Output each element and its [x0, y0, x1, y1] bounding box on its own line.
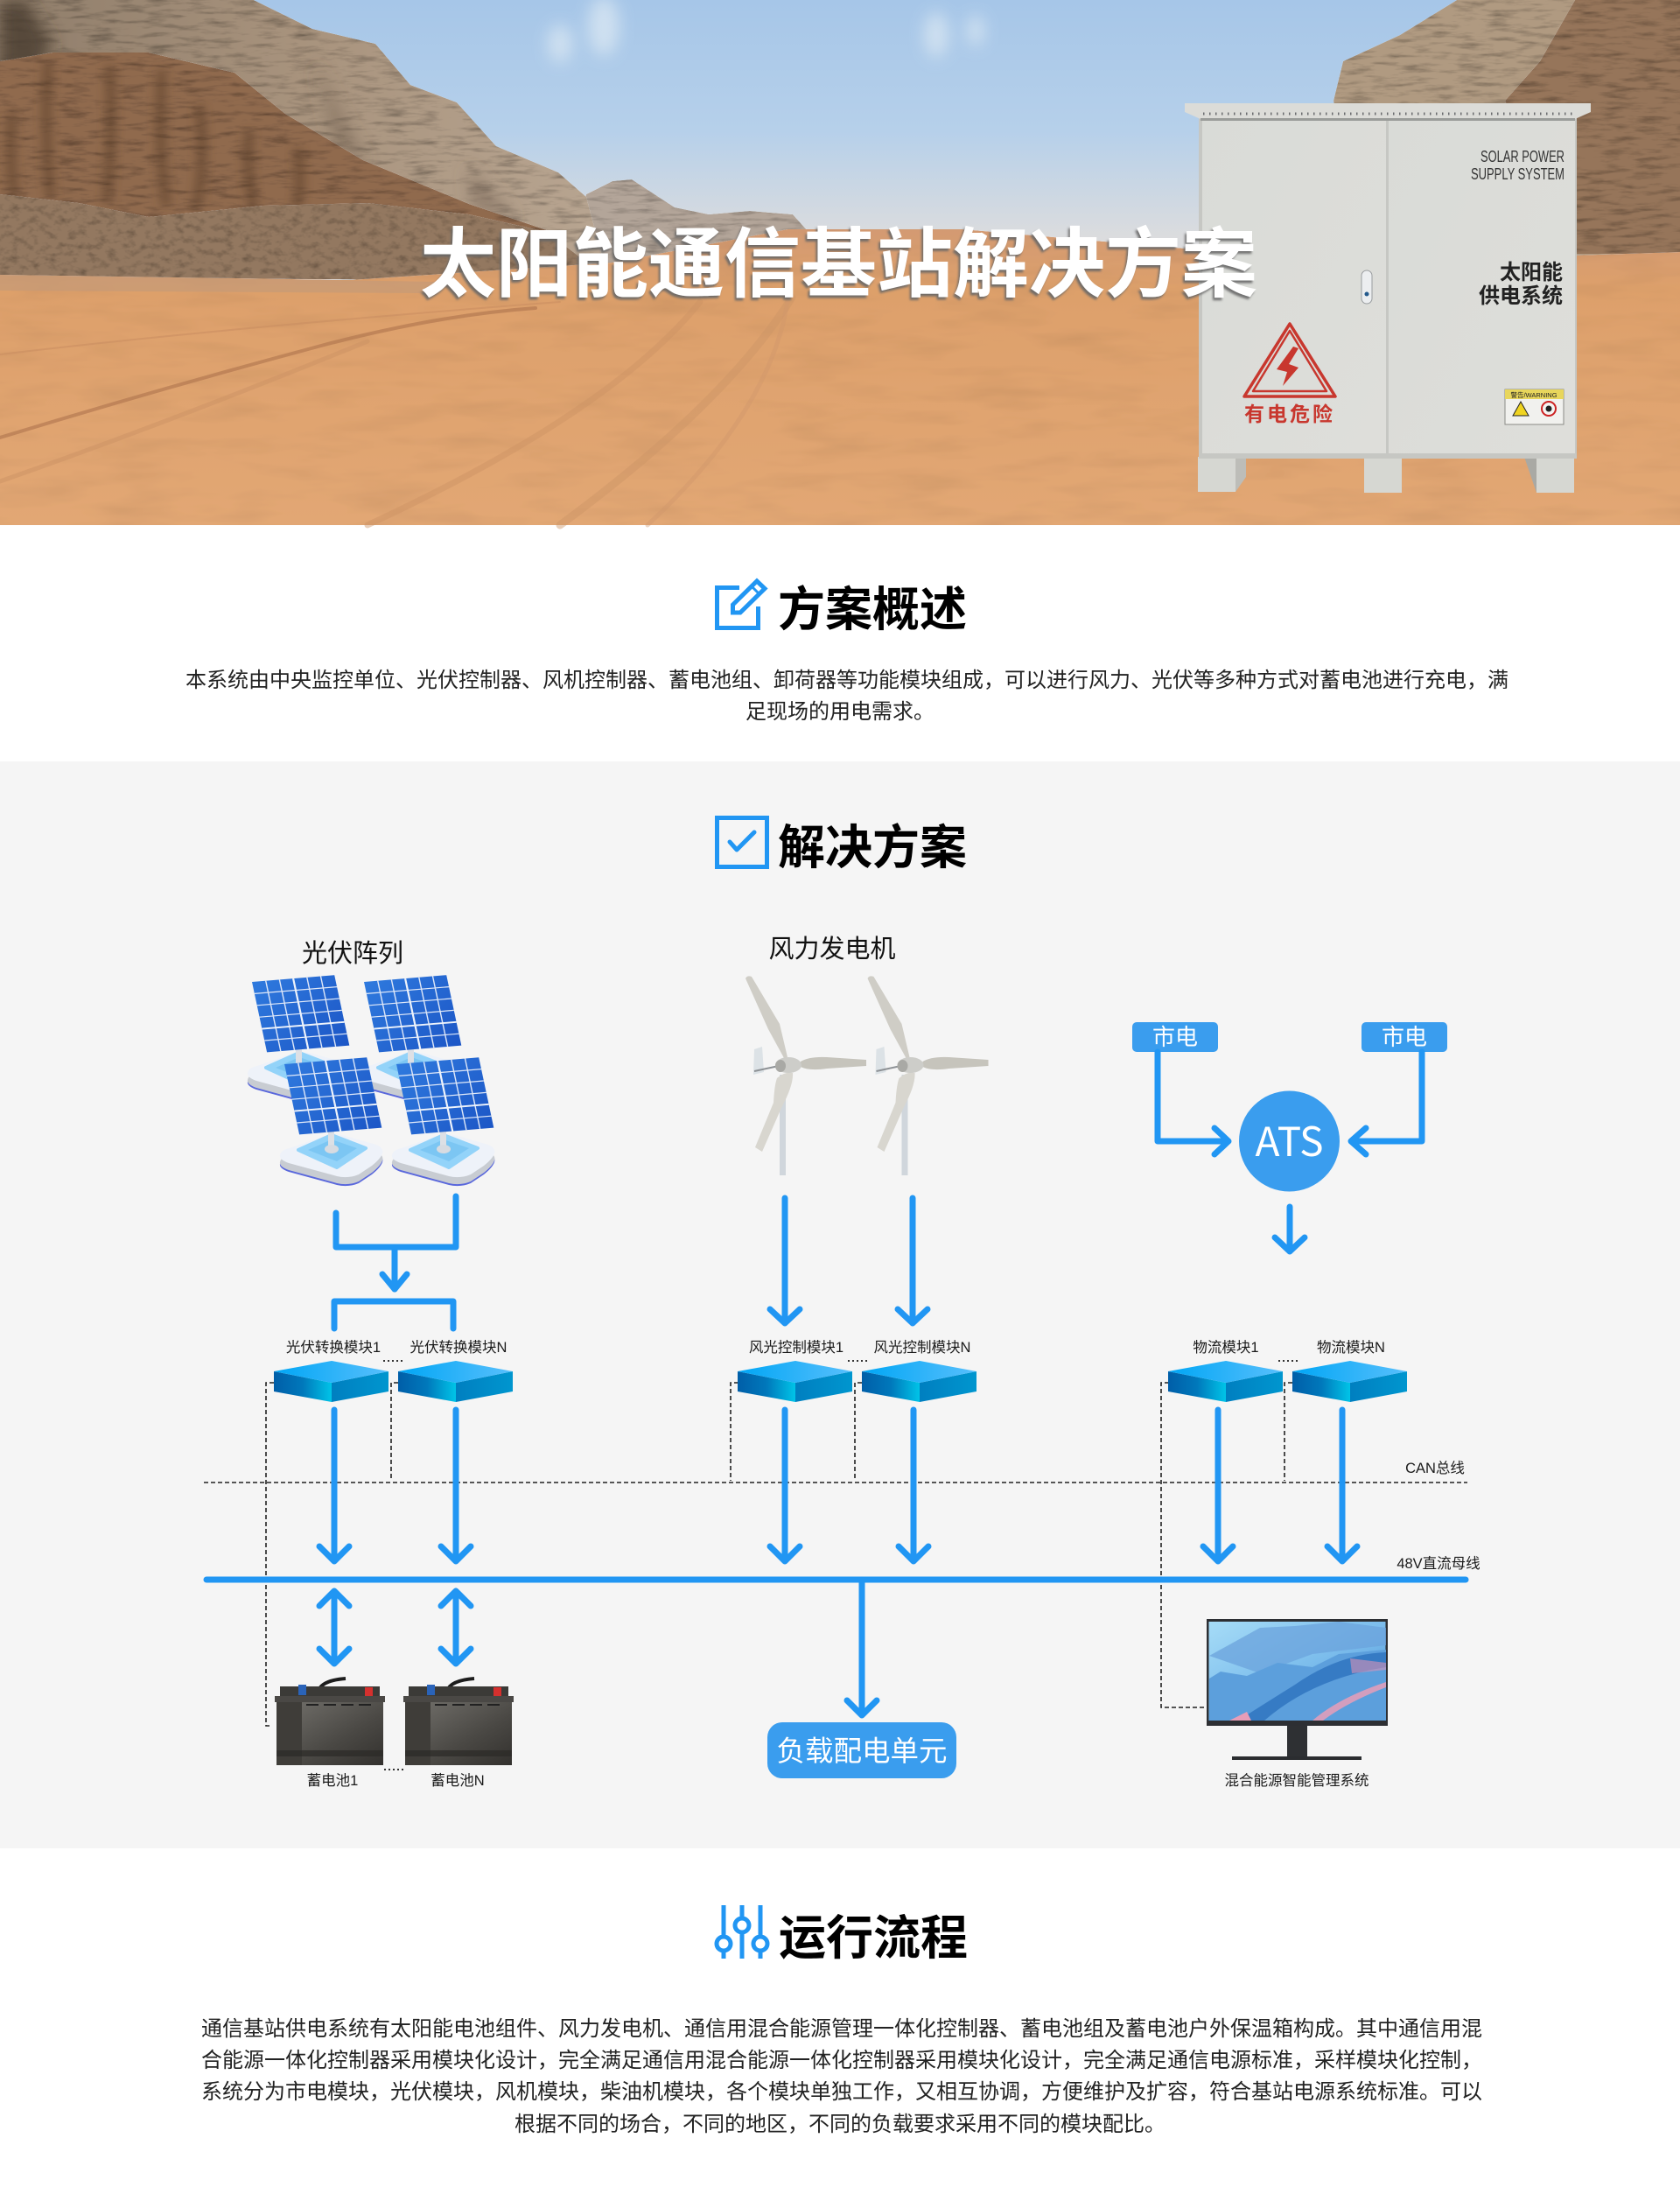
box: mains 1 — [1132, 1022, 1218, 1052]
rock: back cliff — [0, 0, 604, 280]
rock: front cliff — [0, 53, 578, 280]
module labels: 风光控制模块N — [874, 1339, 970, 1356]
sand — [0, 229, 1680, 525]
box: mains 2: 市电 — [1382, 1024, 1427, 1050]
module labels — [286, 1339, 1385, 1356]
arrow: bus to load — [847, 1580, 877, 1715]
rock: right dark cliff — [1505, 0, 1680, 254]
batteries — [275, 1679, 514, 1770]
process text — [201, 2017, 1482, 2136]
load unit button: 负载配电单元 — [776, 1735, 948, 1767]
cabinet english text: SUPPLY SYSTEM — [1471, 165, 1564, 183]
sand tracks — [0, 298, 792, 525]
section: overview — [186, 581, 1508, 724]
section background: solution — [0, 761, 1680, 1848]
warning label — [1505, 389, 1564, 424]
monitor — [1207, 1619, 1388, 1760]
module labels: 光伏转换模块N — [410, 1339, 507, 1356]
arrows: battery double — [319, 1591, 471, 1664]
label: battery n: 蓄电池N — [430, 1772, 485, 1789]
danger triangle — [1244, 324, 1335, 396]
module labels: 风光控制模块1 — [749, 1339, 844, 1356]
cabinet english text — [1471, 148, 1564, 183]
danger text: 有电危险 — [1244, 403, 1335, 425]
diagram: system — [204, 935, 1480, 1789]
overview text: 本系统由中央监控单位、光伏控制器、风机控制器、蓄电池组、卸荷器等功能模块组成，可以进行风力、光伏等多种方式对蓄电池进行充电，满 — [186, 669, 1508, 692]
pv panels — [248, 975, 494, 1186]
icon: sliders — [717, 1905, 767, 1959]
rock: right mountains — [1334, 0, 1680, 280]
module labels: 光伏转换模块1 — [286, 1339, 381, 1356]
clouds — [548, 0, 984, 63]
rock: back cliff shadows — [0, 0, 516, 219]
rock: cliff columns — [10, 61, 300, 210]
wind turbines — [746, 976, 989, 1175]
rock: far mountains — [560, 179, 814, 298]
dc bus line — [206, 1577, 1466, 1582]
left door — [1202, 121, 1386, 453]
box: mains 2 — [1362, 1022, 1447, 1052]
grid inputs — [1132, 1022, 1447, 1251]
module labels: 物流模块1 — [1193, 1339, 1259, 1356]
label: pv array: 光伏阵列 — [302, 939, 403, 968]
box: mains 1: 市电 — [1152, 1024, 1198, 1050]
load unit button — [767, 1722, 956, 1778]
far sand band — [0, 275, 438, 293]
hero title: 太阳能通信基站解决方案 — [420, 222, 1257, 307]
section: solution heading — [718, 817, 967, 874]
right door — [1389, 121, 1575, 453]
process text: 系统分为市电模块，光伏模块，风机模块，柴油机模块，各个模块单独工作，又相互协调，方便维护及扩容，符合基站电源系统标准。可以 — [201, 2080, 1482, 2104]
cabinet — [1185, 103, 1591, 493]
label: can bus: CAN总线 — [1405, 1460, 1465, 1476]
module boxes — [274, 1361, 1407, 1402]
arrow: pv brackets — [334, 1196, 456, 1328]
overview text — [186, 669, 1508, 724]
process text: 通信基站供电系统有太阳能电池组件、风力发电机、通信用混合能源管理一体化控制器、蓄电池组及蓄电池户外保温箱构成。其中通信用混 — [201, 2017, 1482, 2041]
panel: hero banner — [0, 0, 1680, 525]
icon: checkbox — [718, 817, 766, 866]
arrows: mains to ats — [1158, 1052, 1422, 1251]
process text: 根据不同的场合，不同的地区，不同的负载要求采用不同的模块配比。 — [514, 2113, 1166, 2136]
rock: scree slope — [0, 194, 612, 282]
label: battery 1: 蓄电池1 — [307, 1772, 358, 1789]
section: process — [201, 1905, 1482, 2136]
overview text: 足现场的用电需求。 — [746, 700, 934, 724]
door handle — [1362, 270, 1372, 304]
ats circle — [1239, 1090, 1340, 1192]
warning label: 警告/WARNING — [1510, 390, 1558, 399]
cabinet english text: SOLAR POWER — [1480, 148, 1564, 165]
can bus and signal dashes — [204, 1383, 1467, 1726]
heading: solution: 解决方案 — [778, 822, 967, 874]
heading: overview: 方案概述 — [778, 584, 967, 636]
label: monitor: 混合能源智能管理系统 — [1225, 1772, 1368, 1789]
arrows: wind to controller — [770, 1198, 928, 1323]
cabinet body — [1199, 117, 1577, 459]
arrows: modules to bus — [319, 1410, 1357, 1561]
cabinet roof — [1185, 103, 1591, 121]
heading: process: 运行流程 — [779, 1912, 968, 1965]
icon: edit — [718, 581, 765, 628]
cabinet feet — [1198, 457, 1574, 493]
cabinet chinese text: 供电系统 — [1479, 284, 1563, 308]
module labels: 物流模块N — [1317, 1339, 1385, 1356]
cabinet chinese text: 太阳能 — [1500, 261, 1563, 284]
cabinet chinese text — [1479, 261, 1563, 308]
ats circle: ATS — [1255, 1111, 1324, 1168]
label: dc bus: 48V直流母线 — [1396, 1555, 1480, 1572]
process text: 合能源一体化控制器采用模块化设计，完全满足通信用混合能源一体化控制器采用模块化设计，完全满足通信电源标准，采样模块化控制， — [201, 2049, 1482, 2072]
label: wind generator: 风力发电机 — [768, 935, 896, 964]
